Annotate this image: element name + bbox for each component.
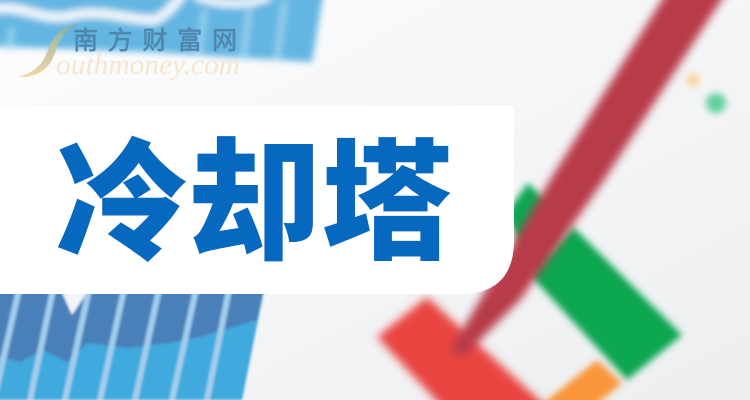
green bar behind pen <box>505 183 565 273</box>
logo chinese name: 南方财富网 <box>73 27 237 55</box>
title text: 冷 <box>56 97 188 288</box>
title text: 却 <box>188 97 320 288</box>
orange dot <box>686 73 700 87</box>
title text: 塔 <box>321 97 453 288</box>
logo url: outhmoney.com <box>56 49 240 81</box>
green dot <box>706 93 726 113</box>
orange bar <box>535 360 622 400</box>
chart peak <box>60 288 90 315</box>
bottom-left blurred chart <box>0 285 265 400</box>
title panel <box>0 106 514 294</box>
title text <box>56 97 453 288</box>
watermark logo <box>19 24 240 81</box>
red bar <box>377 297 550 400</box>
logo swoosh <box>19 24 78 77</box>
red pen <box>450 0 728 358</box>
top-left blurred chart <box>0 0 324 62</box>
green bar <box>530 227 682 380</box>
chart wave <box>0 0 185 20</box>
